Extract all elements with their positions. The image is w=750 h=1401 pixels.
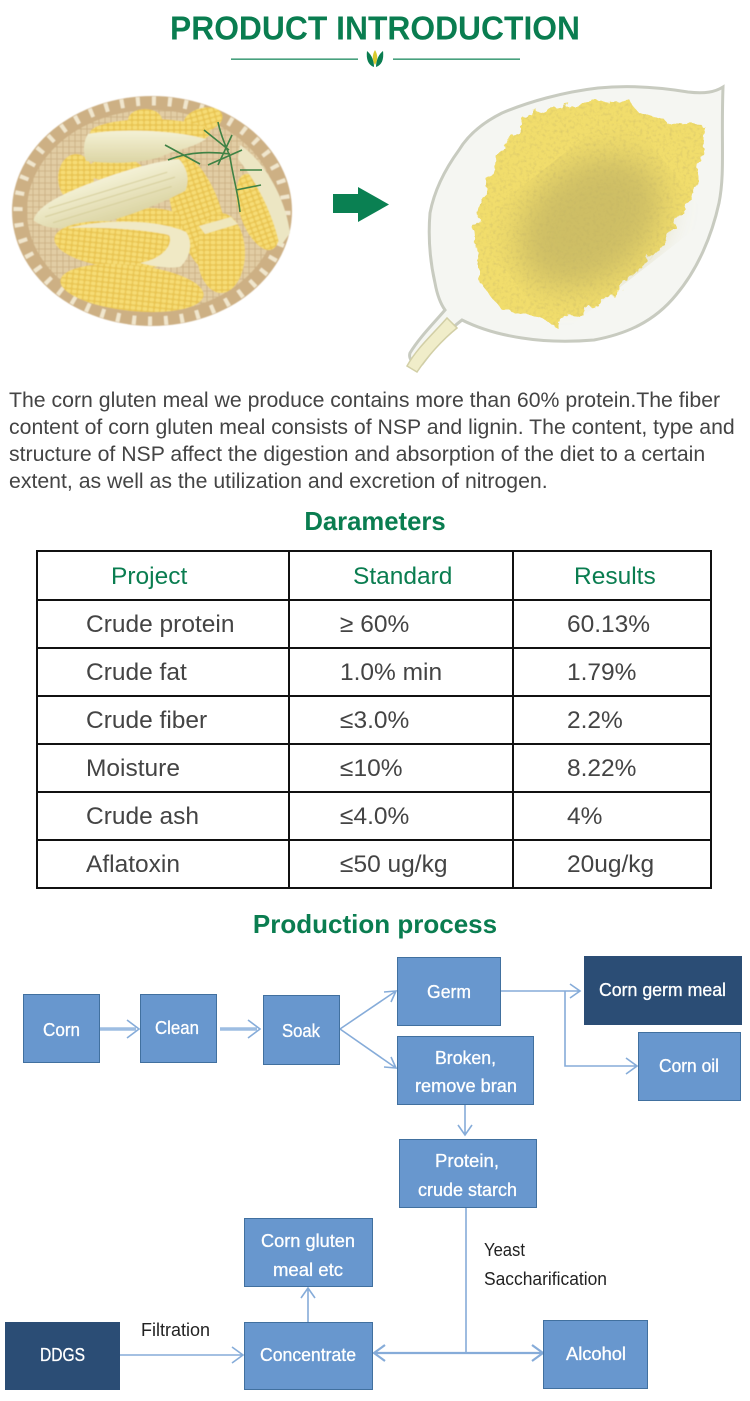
box: corn: Corn bbox=[43, 1020, 80, 1040]
parameters table bbox=[36, 550, 712, 889]
parameters table: Results bbox=[574, 562, 656, 590]
box: corn germ meal bbox=[584, 956, 742, 1024]
parameters table: ≥ 60% bbox=[340, 611, 409, 638]
production process flow chart bbox=[5, 956, 742, 1390]
box: concentrate bbox=[244, 1322, 372, 1390]
arrow: soak to broken bbox=[340, 1029, 396, 1068]
parameters table: Crude fiber bbox=[86, 707, 207, 734]
parameters table: 4% bbox=[567, 803, 602, 830]
parameters table: ≤3.0% bbox=[340, 707, 409, 734]
parameters table: 8.22% bbox=[567, 755, 636, 782]
box: corn gluten meal etc bbox=[244, 1218, 372, 1286]
label: yeast and saccharification: Saccharification bbox=[484, 1269, 607, 1289]
box: protein, crude starch: Protein, bbox=[435, 1151, 499, 1171]
arrow: soak to germ bbox=[340, 991, 396, 1029]
box: protein, crude starch bbox=[400, 1140, 536, 1208]
box: clean: Clean bbox=[155, 1018, 199, 1038]
intro paragraph: extent, as well as the utilization and excretion of nitrogen. bbox=[9, 469, 548, 493]
parameters table: 20ug/kg bbox=[567, 851, 654, 878]
box: broken, remove bran bbox=[398, 1036, 534, 1104]
arrow: clean to soak bbox=[220, 1020, 260, 1038]
arrow: concentrate to corn gluten meal bbox=[301, 1288, 315, 1322]
box: germ bbox=[398, 958, 500, 1026]
parameters table: ≤4.0% bbox=[340, 803, 409, 830]
parameters table: ≤50 ug/kg bbox=[340, 851, 447, 878]
photo: corn in a woven basket bbox=[11, 95, 293, 327]
photo: corn gluten meal powder in a glass leaf dish bbox=[406, 84, 725, 373]
box: corn oil: Corn oil bbox=[659, 1056, 719, 1076]
label: yeast and saccharification bbox=[484, 1240, 607, 1289]
parameters table: Standard bbox=[353, 562, 452, 590]
box: corn gluten meal etc: Corn gluten bbox=[261, 1231, 355, 1251]
intro paragraph: content of corn gluten meal consists of NSP and lignin. The content, type and bbox=[9, 415, 735, 439]
parameters table: 1.79% bbox=[567, 659, 636, 686]
green arrow bbox=[333, 187, 389, 222]
parameters table: Project bbox=[111, 562, 187, 590]
box: broken, remove bran: remove bran bbox=[415, 1076, 517, 1096]
green sprig bbox=[165, 122, 262, 212]
arrow: protein to concentrate and alcohol bbox=[374, 1208, 543, 1361]
parameters table: Crude fat bbox=[86, 659, 187, 686]
box: clean bbox=[140, 994, 216, 1062]
label: filtration: Filtration bbox=[141, 1320, 210, 1340]
parameters table: 2.2% bbox=[567, 707, 623, 734]
intro paragraph: The corn gluten meal we produce contains more than 60% protein.The fiber bbox=[9, 388, 720, 412]
intro paragraph: structure of NSP affect the digestion and absorption of the diet to a certain bbox=[9, 442, 705, 466]
parameters table: Moisture bbox=[86, 755, 180, 782]
box: broken, remove bran: Broken, bbox=[435, 1048, 496, 1068]
box: soak: Soak bbox=[282, 1021, 321, 1041]
intro paragraph bbox=[9, 388, 735, 493]
parameters table: 1.0% min bbox=[340, 659, 442, 686]
box: corn oil bbox=[638, 1032, 740, 1100]
arrow: ddgs to concentrate bbox=[120, 1347, 243, 1363]
title divider with leaf icon bbox=[231, 50, 520, 67]
box: corn gluten meal etc: meal etc bbox=[273, 1260, 343, 1280]
arrow: germ to corn germ meal and corn oil bbox=[500, 984, 637, 1074]
box: ddgs: DDGS bbox=[40, 1345, 85, 1365]
parameters table: 60.13% bbox=[567, 611, 650, 638]
box: soak bbox=[264, 996, 340, 1064]
box: corn germ meal: Corn germ meal bbox=[599, 980, 726, 1000]
parameters table: Crude ash bbox=[86, 803, 199, 830]
parameters table: Crude protein bbox=[86, 611, 234, 638]
box: ddgs bbox=[6, 1322, 120, 1390]
box: corn bbox=[24, 994, 100, 1062]
label: yeast and saccharification: Yeast bbox=[484, 1240, 525, 1260]
box: germ: Germ bbox=[427, 982, 471, 1002]
arrow: corn to clean bbox=[100, 1020, 139, 1038]
box: alcohol bbox=[544, 1320, 648, 1388]
box: alcohol: Alcohol bbox=[566, 1344, 626, 1364]
heading: parameters: Darameters bbox=[304, 508, 446, 536]
title: PRODUCT INTRODUCTION bbox=[170, 10, 580, 46]
box: protein, crude starch: crude starch bbox=[418, 1180, 517, 1200]
parameters table: Aflatoxin bbox=[86, 851, 180, 878]
heading: production process: Production process bbox=[253, 909, 497, 939]
arrow: broken to protein bbox=[458, 1104, 472, 1135]
parameters table: ≤10% bbox=[340, 755, 402, 782]
box: concentrate: Concentrate bbox=[260, 1345, 356, 1365]
